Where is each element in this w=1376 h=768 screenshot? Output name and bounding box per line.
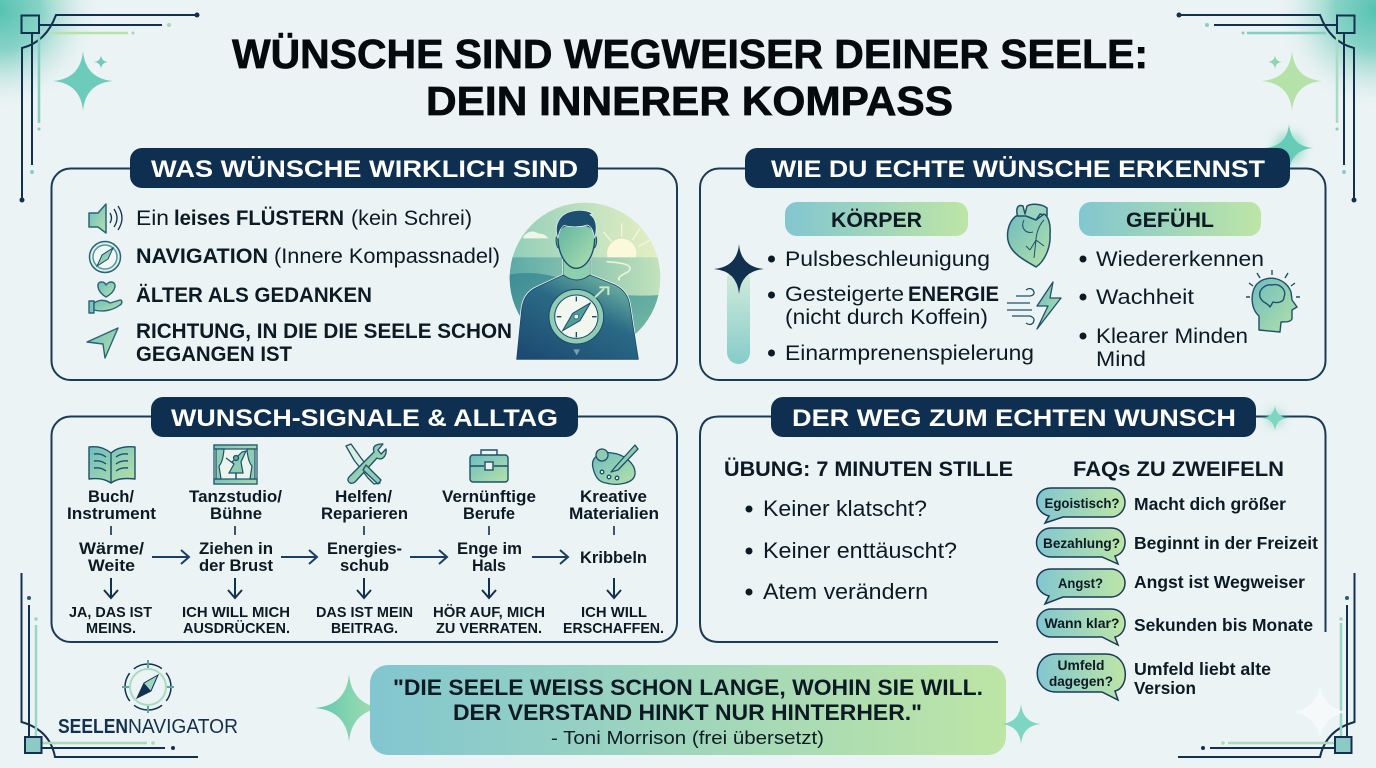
- logo: seelennavigator: SEELEN: [58, 716, 128, 738]
- column: vernünftige berufe: Berufe: [463, 505, 515, 523]
- panel: was wünsche wirklich sind: [52, 148, 677, 380]
- icon: briefcase: [470, 450, 508, 482]
- arrow: down: [357, 578, 371, 598]
- column: tanzstudio: der Brust: [199, 556, 273, 575]
- heading pill: wie du echte wünsche erkennst: WIE DU ECHTE WÜNSCHE ERKENNST: [771, 156, 1265, 183]
- text: navigation: (Innere Kompassnadel): [274, 245, 500, 268]
- icon: wrench and screwdriver: [346, 444, 386, 484]
- quote box: [370, 665, 1006, 755]
- column: vernünftige berufe: Vernünftige: [442, 488, 536, 506]
- corner ornament: bottom right: [1178, 573, 1354, 757]
- column: buch: JA, DAS IST: [69, 604, 152, 621]
- vertical bar with navy star: [714, 244, 764, 364]
- logo: seelennavigator: [58, 660, 238, 738]
- column: kreative materialien: Kreative: [580, 488, 647, 506]
- faq: egoistisch: [1037, 488, 1286, 523]
- column: buch: Wärme/: [79, 539, 144, 558]
- column: helfen: [316, 444, 413, 637]
- column: buch: Weite: [88, 556, 135, 575]
- text: richtung: RICHTUNG, IN DIE DIE SEELE SCHON: [136, 320, 512, 343]
- list: körper: Pulsbeschleunigung: [785, 248, 990, 271]
- text: navigation: NAVIGATION: [136, 245, 268, 268]
- text: leises flüstern: leises FLÜSTERN: [174, 207, 344, 230]
- icon: palette and brush: [593, 445, 638, 484]
- faq: bezahlung: Beginnt in der Freizeit: [1134, 533, 1318, 553]
- text: leises flüstern: Ein: [136, 207, 169, 230]
- column: buch: Buch/: [88, 488, 134, 506]
- text: leises flüstern: [136, 207, 472, 230]
- sparkle glow: [1262, 405, 1288, 431]
- logo: seelennavigator: NAVIGATOR: [128, 716, 238, 738]
- exercise: 7 minuten stille: Atem verändern: [763, 579, 928, 604]
- panel: wunsch-signale und alltag: [52, 397, 677, 642]
- faq: egoistisch: Egoistisch?: [1044, 496, 1120, 511]
- list: körper: Gesteigerte: [785, 283, 904, 306]
- exercise: 7 minuten stille: ÜBUNG: 7 MINUTEN STILLE: [724, 458, 1013, 481]
- arrow: down: [607, 578, 621, 598]
- column: helfen: schub: [340, 556, 389, 575]
- faq: bezahlung: Bezahlung?: [1043, 536, 1120, 551]
- icon: compass: [90, 242, 120, 272]
- faq: umfeld dagegen: Version: [1134, 678, 1196, 698]
- faq: wann klar: Wann klar?: [1044, 616, 1120, 631]
- list: gefühl: Klearer Minden: [1096, 325, 1248, 348]
- faq: wann klar: Sekunden bis Monate: [1134, 615, 1313, 635]
- column: vernünftige berufe: [433, 450, 545, 637]
- heading pill: was wünsche wirklich sind: [130, 148, 598, 188]
- arrow: right: [410, 550, 447, 564]
- title: WÜNSCHE SIND WEGWEISER DEINER SEELE:: [232, 31, 1148, 77]
- text: richtung: GEGANGEN IST: [136, 343, 292, 366]
- icon: direction arrow: [87, 328, 118, 358]
- heading pill: was wünsche wirklich sind: WAS WÜNSCHE WIRKLICH SIND: [151, 156, 578, 183]
- column: helfen: DAS IST MEIN: [316, 604, 413, 621]
- icon: heart: [1008, 204, 1050, 267]
- icon: head with brain: [1246, 270, 1300, 332]
- column: kreative materialien: Materialien: [569, 505, 659, 523]
- column: tanzstudio: AUSDRÜCKEN.: [183, 620, 290, 637]
- column: tanzstudio: Bühne: [210, 505, 262, 523]
- icon: heart in hand: [89, 282, 122, 313]
- quote box: DER VERSTAND HINKT NUR HINTERHER.": [453, 700, 922, 725]
- quote box: "DIE SEELE WEISS SCHON LANGE, WOHIN SIE WILL.: [393, 675, 983, 700]
- column: vernünftige berufe: Enge im: [457, 539, 522, 558]
- pill: körper: [785, 202, 968, 236]
- list: gefühl: Mind: [1096, 348, 1146, 371]
- sparkle star: bottom right white: [1295, 687, 1345, 737]
- illustration: person with compass: [507, 200, 663, 359]
- title: [232, 31, 1148, 124]
- column: vernünftige berufe: HÖR AUF, MICH: [433, 604, 545, 621]
- column: kreative materialien: ERSCHAFFEN.: [563, 620, 664, 637]
- faqs: [1036, 458, 1318, 700]
- column: tanzstudio: Ziehen in: [199, 539, 273, 558]
- arrow: down: [482, 578, 496, 598]
- icon: book: [89, 447, 135, 483]
- sparkle stars: top left: [53, 51, 113, 111]
- heading pill: wunsch-signale: [151, 397, 578, 437]
- column: helfen: Helfen/: [335, 488, 392, 506]
- text: älter als gedanken: ÄLTER ALS GEDANKEN: [136, 284, 372, 307]
- list: gefühl: Wiedererkennen: [1096, 248, 1264, 271]
- column: kreative materialien: [563, 445, 664, 637]
- corner ornament: top right: [1176, 12, 1356, 202]
- icon: speaker: [89, 204, 122, 233]
- faq: bezahlung: [1036, 528, 1318, 564]
- list: körper: [768, 248, 1034, 365]
- heading pill: der weg: [771, 397, 1256, 437]
- column: tanzstudio: ICH WILL MICH: [182, 604, 290, 621]
- exercise: 7 minuten stille: Keiner enttäuscht?: [763, 538, 957, 563]
- faq: egoistisch: Macht dich größer: [1134, 494, 1286, 514]
- list: gefühl: [1080, 248, 1264, 371]
- heading pill: wie du echte wünsche erkennst: [745, 148, 1290, 188]
- column: vernünftige berufe: ZU VERRATEN.: [436, 620, 542, 637]
- quote box: - Toni Morrison (frei übersetzt): [551, 728, 824, 748]
- sparkle star: quote left: [315, 674, 383, 742]
- sparkle stars: top right: [1262, 51, 1322, 172]
- panel: wie du echte wünsche erkennst: [700, 148, 1326, 380]
- column: tanzstudio: Tanzstudio/: [189, 488, 282, 506]
- panel: der weg zum echten wunsch: [700, 397, 1326, 700]
- column: helfen: BEITRAG.: [331, 620, 398, 637]
- icon: logo compass: [122, 660, 174, 713]
- arrow: right: [532, 550, 568, 564]
- icon: stage: [214, 445, 257, 484]
- faq: angst: [1037, 569, 1305, 604]
- heading pill: der weg: DER WEG ZUM ECHTEN WUNSCH: [792, 405, 1236, 432]
- heading pill: wunsch-signale: WUNSCH-SIGNALE & ALLTAG: [171, 405, 558, 432]
- list: gefühl: Wachheit: [1096, 286, 1194, 309]
- exercise: 7 minuten stille: Keiner klatscht?: [763, 496, 927, 521]
- faq: angst: Angst?: [1058, 576, 1103, 591]
- list: körper: (nicht durch Koffein): [785, 306, 988, 329]
- arrow: right: [152, 550, 189, 564]
- column: kreative materialien: ICH WILL: [581, 604, 647, 621]
- arrow: down: [104, 578, 118, 598]
- pill: gefühl: GEFÜHL: [1126, 209, 1214, 232]
- column: vernünftige berufe: Hals: [472, 556, 506, 575]
- corner ornament: bottom left: [22, 573, 198, 757]
- faq: wann klar: [1037, 609, 1313, 645]
- text: leises flüstern: (kein Schrei): [351, 207, 472, 230]
- column: buch: Instrument: [67, 505, 157, 523]
- list: körper: ENERGIE: [908, 283, 999, 306]
- title: DEIN INNERER KOMPASS: [426, 78, 953, 124]
- column: kreative materialien: Kribbeln: [580, 548, 647, 567]
- arrow: down: [228, 578, 242, 598]
- pill: körper: KÖRPER: [831, 209, 922, 232]
- column: helfen: Energies-: [327, 539, 402, 558]
- faqs: FAQs ZU ZWEIFELN: [1073, 458, 1284, 481]
- list: körper: Einarmprenenspielerung: [785, 342, 1034, 365]
- faq: umfeld dagegen: Umfeld liebt alte: [1134, 659, 1271, 679]
- exercise: 7 minuten stille: [724, 458, 1013, 604]
- arrow: right: [281, 550, 317, 564]
- faq: umfeld dagegen: dagegen?: [1049, 674, 1113, 689]
- text: richtung: [136, 320, 512, 366]
- faq: umfeld dagegen: Umfeld: [1058, 658, 1104, 673]
- column: buch: [67, 447, 157, 637]
- faq: umfeld dagegen: [1037, 654, 1271, 700]
- pill: gefühl: [1079, 202, 1261, 236]
- text: navigation: [136, 245, 500, 268]
- corner ornament: top left: [20, 12, 200, 202]
- column: helfen: Reparieren: [321, 505, 408, 523]
- sparkle star: quote right: [1001, 704, 1041, 744]
- faq: angst: Angst ist Wegweiser: [1134, 572, 1305, 592]
- icon: energy bolt with wind: [1007, 282, 1061, 329]
- column: tanzstudio: [182, 445, 290, 637]
- column: buch: MEINS.: [86, 620, 136, 637]
